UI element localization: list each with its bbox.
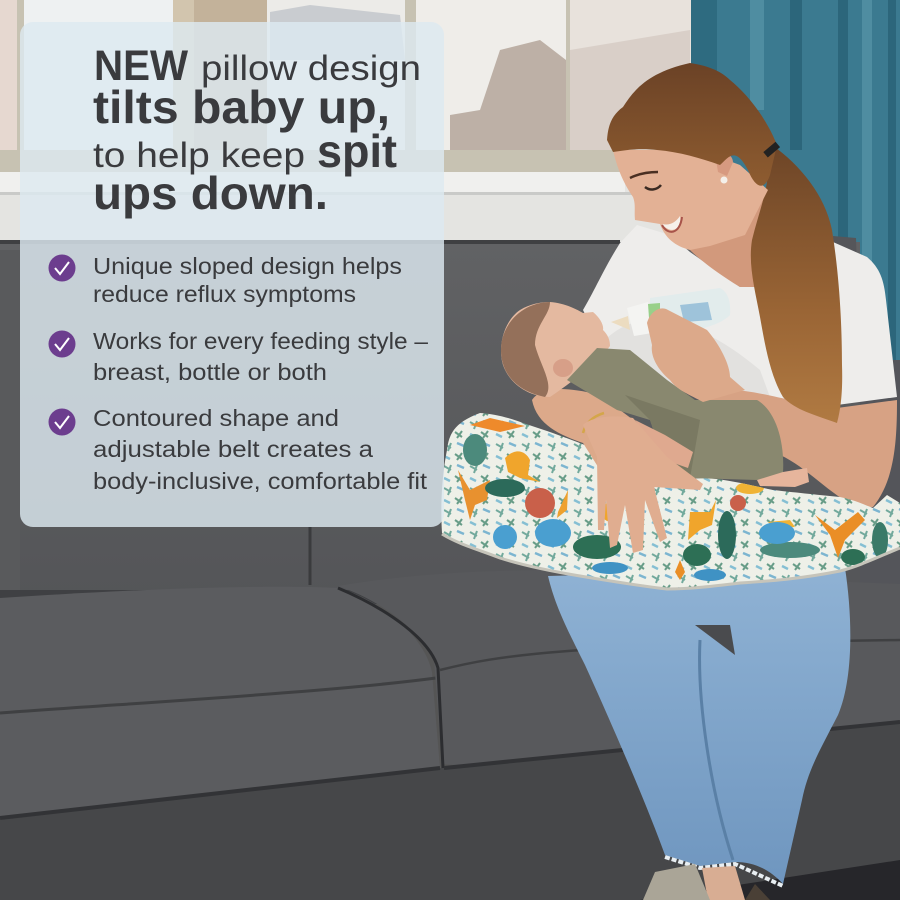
left seat cushion <box>0 587 440 816</box>
right arm <box>700 390 897 507</box>
window <box>0 0 692 195</box>
nursing pillow <box>441 413 900 589</box>
ankle and shoes <box>702 866 745 900</box>
baby <box>501 302 809 487</box>
heading: pillow design <box>201 49 421 88</box>
check icon <box>48 254 76 282</box>
bottle <box>611 288 730 336</box>
sofa <box>0 236 900 900</box>
wall <box>0 0 900 260</box>
bullet 2: Works for every feeding style – <box>93 328 428 354</box>
bullet 3: body-inclusive, comfortable fit <box>93 468 428 494</box>
heading: tilts baby up, <box>93 81 390 133</box>
bullet 1 <box>48 253 402 307</box>
bullet 3 <box>48 405 428 494</box>
shirt <box>583 225 897 405</box>
jeans <box>548 568 850 886</box>
bullet 2: breast, bottle or both <box>93 359 327 385</box>
hair tie <box>763 142 780 157</box>
baby head <box>501 302 610 397</box>
seat base <box>0 722 900 900</box>
heading: ups down. <box>93 167 328 219</box>
heading <box>93 42 421 219</box>
ferns and leaves <box>485 479 525 497</box>
bullet 3: Contoured shape and <box>93 405 339 431</box>
heading: NEW <box>94 42 188 90</box>
check icon <box>48 408 76 436</box>
translucent text panel <box>20 22 444 527</box>
bracelet <box>583 413 604 433</box>
blue leaves <box>535 519 571 547</box>
curtain <box>691 0 900 360</box>
flowers <box>525 488 555 518</box>
heading: to help keep <box>93 136 305 175</box>
bullet 2 <box>48 328 428 385</box>
face <box>613 150 768 250</box>
floor <box>640 860 900 900</box>
heading: spit <box>317 125 397 177</box>
bullet 1: Unique sloped design helps <box>93 253 402 279</box>
facial features <box>630 154 733 232</box>
check icon <box>48 330 76 358</box>
shirt shadow <box>600 320 770 400</box>
hair <box>607 63 777 186</box>
baby hand <box>635 420 693 468</box>
bullet 3: adjustable belt creates a <box>93 436 373 462</box>
mother's forearm <box>532 389 655 490</box>
baby ear <box>553 359 573 377</box>
right seat cushion <box>338 570 900 766</box>
foxes <box>470 418 525 432</box>
baby outfit <box>567 348 783 480</box>
mother's hand on pillow <box>583 416 703 553</box>
ponytail <box>751 145 842 423</box>
bottle hand <box>647 308 745 402</box>
bullet 1: reduce reflux symptoms <box>93 281 356 307</box>
baby foot <box>757 468 809 487</box>
woman <box>548 63 897 900</box>
neck <box>672 190 765 287</box>
